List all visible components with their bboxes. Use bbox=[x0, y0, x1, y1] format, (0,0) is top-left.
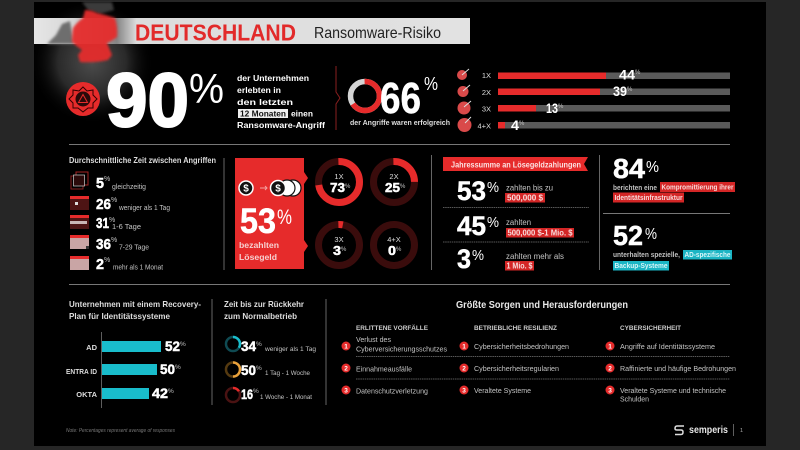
ring: 16 percent: % bbox=[253, 388, 259, 395]
row: 53 percent: 500,000 $ bbox=[507, 194, 544, 202]
ring: 50 percent: 1 Tag - 1 Woche bbox=[265, 370, 310, 377]
row: 26 percent: weniger als 1 Tag bbox=[118, 205, 170, 212]
column: cybersecurity: 3 bbox=[608, 388, 612, 394]
bar: AD: 52 bbox=[165, 338, 180, 354]
donut: 4+X 0 percent: 4+X bbox=[387, 235, 401, 244]
row: 53 percent: % bbox=[487, 179, 499, 196]
column: operational resilience: 3 bbox=[462, 388, 466, 394]
icon: coins: $ bbox=[243, 184, 249, 194]
column: operational resilience: Cybersicherheitsregularien bbox=[474, 366, 559, 373]
column: operational resilience bbox=[460, 325, 569, 395]
text: 90 percent description: Ransomware-Angriff bbox=[237, 121, 325, 130]
text: 90 percent description bbox=[237, 74, 325, 130]
column: incidents: 2 bbox=[344, 366, 348, 372]
column: incidents: 3 bbox=[344, 388, 348, 394]
row 2X bbox=[458, 83, 730, 99]
row: 31 percent bbox=[70, 215, 141, 232]
chart: attack frequency bars bbox=[457, 66, 730, 133]
column: cybersecurity: 2 bbox=[608, 366, 612, 372]
row: 5 percent: % bbox=[104, 176, 110, 183]
bar: Entra ID: 50 bbox=[160, 361, 175, 377]
donut: 2X 25 percent: 25 bbox=[385, 180, 400, 195]
ring: 34 percent: 34 bbox=[241, 338, 256, 354]
map glow bbox=[34, 2, 164, 127]
stat: 84 percent: berichten eine bbox=[613, 185, 657, 192]
column: cybersecurity: 1 bbox=[608, 344, 612, 350]
stat: 84 percent: % bbox=[646, 159, 659, 176]
column: cybersecurity bbox=[606, 325, 736, 404]
bar: Okta: % bbox=[168, 388, 174, 395]
row 1X bbox=[457, 66, 730, 82]
panel: time to recovery bbox=[224, 299, 316, 402]
row: 53 percent: zahlten bis zu bbox=[506, 184, 553, 192]
bar: Okta bbox=[76, 385, 174, 401]
donut: 1X 73 percent: 73 bbox=[330, 180, 345, 195]
ribbon heading: Jahressumme an Lösegeldzahlungen bbox=[451, 160, 581, 170]
panel: annual ransom totals bbox=[443, 157, 588, 274]
column: incidents: 1 bbox=[344, 344, 348, 350]
row: 5 percent: 5 bbox=[96, 175, 104, 192]
bar: AD: % bbox=[180, 341, 186, 348]
row 3X: 3X bbox=[482, 104, 491, 114]
stat: 53 percent: 53 bbox=[240, 202, 276, 241]
column: cybersecurity: Raffinierte und häufige Bedrohungen bbox=[620, 366, 736, 373]
stat: 84 percent: 84 bbox=[613, 153, 645, 184]
row: 45 percent: 45 bbox=[457, 211, 486, 241]
column: incidents: Verlust des bbox=[356, 337, 391, 344]
row: 26 percent: % bbox=[111, 197, 117, 204]
row: 45 percent bbox=[457, 211, 574, 241]
text: 90 percent description: erlebten in bbox=[237, 86, 281, 95]
heading: Zeit bis zur Rückkehr bbox=[224, 299, 305, 309]
column: incidents bbox=[342, 324, 448, 396]
row: 3 percent: zahlten mehr als bbox=[506, 252, 564, 261]
row: 45 percent: % bbox=[487, 214, 499, 231]
stat: 66 percent donut bbox=[350, 74, 450, 127]
row: 31 percent: % bbox=[109, 217, 115, 224]
panel: paid ransom: Lösegeld bbox=[239, 252, 277, 262]
ring: 34 percent bbox=[226, 337, 316, 354]
row 2X: 39 bbox=[613, 83, 627, 99]
text: 90 percent description: einen bbox=[291, 110, 313, 118]
row: 45 percent: zahlten bbox=[506, 218, 531, 227]
stat: 84 percent: Identitätsinfrastruktur bbox=[614, 195, 683, 202]
stat: 84 percent: Kompromittierung ihrer bbox=[662, 184, 734, 192]
donut: 4+X 0 percent: % bbox=[396, 247, 402, 253]
row 1X: % bbox=[635, 70, 641, 76]
row: 3 percent bbox=[457, 244, 564, 274]
map of Germany bbox=[72, 10, 117, 62]
row 3X bbox=[458, 100, 730, 116]
donut: 3X 3 percent bbox=[318, 224, 360, 266]
donut: 3X 3 percent: % bbox=[341, 247, 347, 253]
column: cybersecurity: CYBERSICHERHEIT bbox=[620, 325, 681, 332]
row 4+X: 4 bbox=[511, 117, 519, 133]
donut: 1X 73 percent bbox=[318, 162, 360, 202]
row 3X: 13 bbox=[546, 100, 558, 116]
row 2X: % bbox=[627, 87, 633, 93]
column: operational resilience: Veraltete Systeme bbox=[474, 388, 531, 395]
stat: 84 percent bbox=[613, 153, 735, 202]
column: cybersecurity: Angriffe auf Identitätssysteme bbox=[620, 344, 715, 351]
row: 5 percent: gleichzeitig bbox=[112, 184, 146, 191]
bar: Entra ID: % bbox=[175, 364, 181, 371]
bar: Okta: OKTA bbox=[76, 390, 98, 399]
logo: semperis: semperis bbox=[689, 425, 728, 436]
bar: Entra ID bbox=[66, 361, 181, 377]
icon: coins: $ bbox=[275, 184, 281, 194]
row 1X: 1X bbox=[482, 71, 491, 80]
row 4+X bbox=[458, 117, 730, 133]
row: 2 percent: 2 bbox=[96, 256, 104, 273]
title: DEUTSCHLAND bbox=[135, 20, 296, 46]
stat: 90 percent: % bbox=[189, 65, 224, 112]
stat: 52 percent: % bbox=[645, 226, 657, 243]
heading: Durchschnittliche Zeit zwischen Angriffen bbox=[69, 155, 216, 165]
row: 53 percent bbox=[457, 176, 553, 206]
column: operational resilience: 1 bbox=[462, 344, 466, 350]
donut: 4+X 0 percent bbox=[374, 224, 414, 266]
donut: 1X 73 percent: 1X bbox=[334, 172, 344, 181]
donut: 3X 3 percent: 3X bbox=[334, 235, 344, 244]
text: 90 percent description: der Unternehmen bbox=[237, 74, 309, 83]
stat: 52 percent: unterhalten spezielle, bbox=[613, 252, 680, 259]
column: incidents: ERLITTENE VORFÄLLE bbox=[356, 324, 429, 332]
stat: 52 percent: AD-spezifische bbox=[684, 252, 731, 259]
panel: time between attacks bbox=[69, 155, 216, 273]
column: operational resilience: Cybersicherheitsbedrohungen bbox=[474, 344, 569, 351]
row: 45 percent: 500,000 $-1 Mio. $ bbox=[508, 228, 573, 238]
row: 2 percent: % bbox=[104, 257, 110, 264]
page number: 1 bbox=[740, 428, 743, 434]
ring: 34 percent: weniger als 1 Tag bbox=[264, 346, 316, 353]
text: 90 percent description: 12 Monaten bbox=[240, 110, 286, 118]
stat: 66 percent donut: der Angriffe waren erfolgreich bbox=[350, 118, 450, 127]
donut: 2X 25 percent bbox=[374, 162, 414, 202]
panel: time to recovery: zum Normalbetrieb bbox=[224, 311, 297, 321]
row 1X: 44 bbox=[619, 66, 635, 82]
panel: recovery plan chart bbox=[66, 299, 201, 408]
ring: 16 percent: 1 Woche - 1 Monat bbox=[260, 394, 312, 401]
panel: biggest concerns bbox=[342, 300, 736, 404]
column: incidents: Cyberversicherungsschutzes bbox=[356, 346, 448, 354]
row: 5 percent bbox=[71, 172, 146, 192]
ring: 16 percent bbox=[226, 386, 312, 402]
row: 3 percent: % bbox=[472, 247, 484, 264]
row 3X: % bbox=[558, 104, 564, 110]
ring: 16 percent: 16 bbox=[241, 386, 253, 402]
stat: 66 percent donut: % bbox=[424, 74, 438, 94]
row: 3 percent: 3 bbox=[457, 244, 471, 274]
donut: 4+X 0 percent: 0 bbox=[388, 243, 396, 258]
row: 3 percent: 1 Mio. $ bbox=[506, 262, 533, 270]
stat: 52 percent: Backup-Systeme bbox=[614, 263, 668, 270]
column: incidents: Einnahmeausfälle bbox=[356, 366, 412, 374]
row: 26 percent: 26 bbox=[96, 196, 111, 213]
ring: 34 percent: % bbox=[256, 341, 262, 348]
column: operational resilience: BETRIEBLICHE RESILIENZ bbox=[474, 325, 557, 332]
stat: 90 percent: 90 bbox=[106, 58, 189, 144]
row: 36 percent bbox=[70, 235, 149, 253]
row 4+X: 4+X bbox=[477, 122, 491, 130]
donut: 2X 25 percent: 2X bbox=[389, 172, 399, 181]
ribbon heading bbox=[443, 157, 588, 171]
stat: 66 percent donut: 66 bbox=[380, 74, 421, 123]
panel: recovery plan chart: Plan für Identitätssysteme bbox=[69, 311, 170, 321]
row 2X: 2X bbox=[482, 88, 491, 97]
panel: paid ransom bbox=[235, 158, 308, 269]
row: 31 percent: 31 bbox=[96, 215, 109, 232]
column: cybersecurity: Schulden bbox=[620, 396, 649, 404]
divider chevron bbox=[336, 66, 340, 130]
column: operational resilience: 2 bbox=[462, 366, 466, 372]
icon: coins bbox=[239, 180, 301, 196]
footnote: Note: Percentages represent average of responses bbox=[66, 428, 175, 434]
column: cybersecurity: Veraltete Systeme und technische bbox=[620, 388, 726, 395]
donut: 2X 25 percent: % bbox=[400, 184, 406, 190]
title band bbox=[34, 18, 470, 46]
row: 53 percent: 53 bbox=[457, 176, 486, 206]
ring: 50 percent: 50 bbox=[241, 362, 256, 378]
bar: AD bbox=[86, 338, 186, 354]
heading: Unternehmen mit einem Recovery- bbox=[69, 299, 201, 309]
panel: paid ransom: % bbox=[277, 206, 292, 229]
ring: 50 percent: % bbox=[256, 365, 262, 372]
label: bezahlten bbox=[239, 240, 279, 250]
icon: alert badge bbox=[66, 82, 100, 116]
row: 36 percent: 7-29 Tage bbox=[119, 244, 149, 252]
row: 36 percent: 36 bbox=[96, 236, 111, 253]
bar: Entra ID: ENTRA ID bbox=[66, 367, 98, 376]
text: 90 percent description: den letzten bbox=[237, 98, 293, 107]
row: 2 percent bbox=[70, 256, 163, 273]
donut: 1X 73 percent: % bbox=[345, 184, 351, 190]
stat: 52 percent bbox=[613, 220, 732, 270]
stat: 52 percent: 52 bbox=[613, 220, 643, 251]
donut: 3X 3 percent: 3 bbox=[333, 243, 341, 258]
logo: semperis bbox=[675, 425, 728, 436]
ring: 50 percent bbox=[226, 362, 310, 378]
row: 36 percent: % bbox=[111, 237, 117, 244]
column: incidents: Datenschutzverletzung bbox=[356, 388, 428, 396]
row: 31 percent: 1-6 Tage bbox=[112, 224, 141, 231]
row: 2 percent: mehr als 1 Monat bbox=[113, 264, 163, 272]
bar: Okta: 42 bbox=[152, 385, 168, 401]
row: 26 percent bbox=[70, 196, 170, 213]
row 4+X: % bbox=[519, 121, 525, 127]
subtitle: Ransomware-Risiko bbox=[314, 25, 441, 42]
bar: AD: AD bbox=[86, 343, 98, 352]
heading: Größte Sorgen und Herausforderungen bbox=[456, 300, 628, 311]
